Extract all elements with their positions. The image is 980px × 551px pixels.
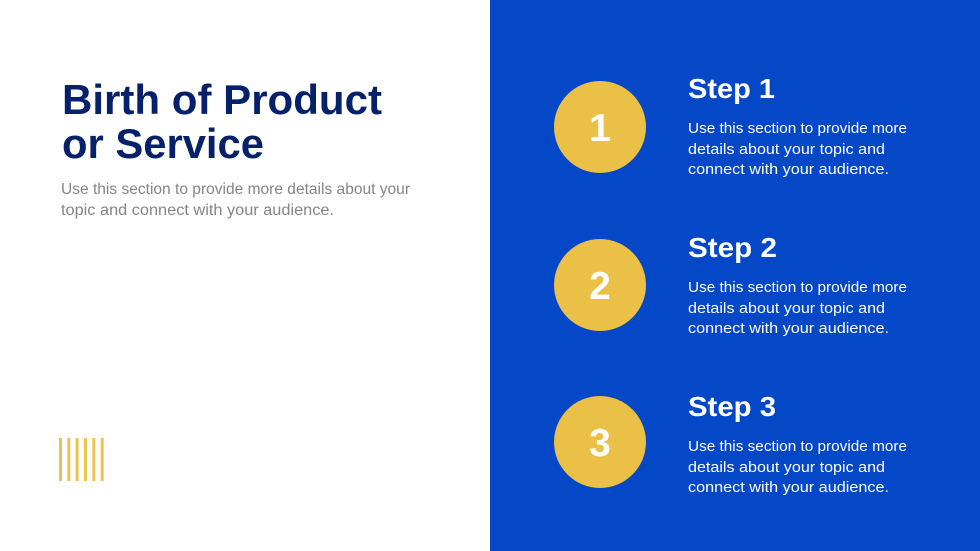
- step 1: [554, 73, 907, 178]
- step 1 number badge: 1: [589, 107, 611, 150]
- step 2 heading: Step 2: [688, 232, 777, 263]
- description text: [61, 181, 410, 219]
- title: [62, 76, 382, 167]
- step 2 number badge: 2: [589, 265, 611, 308]
- step 2 text: connect with your audience.: [688, 320, 889, 337]
- step 1 text: connect with your audience.: [688, 161, 889, 178]
- description text: Use this section to provide more details about your: [61, 181, 410, 198]
- description text: topic and connect with your audience.: [61, 202, 334, 219]
- step 3 text: connect with your audience.: [688, 479, 889, 496]
- step 1 text: details about your topic and: [688, 141, 885, 158]
- icon: yellow vertical bars: [59, 438, 104, 481]
- panel: blue steps background: [490, 0, 980, 551]
- step 2 number badge: [554, 239, 646, 331]
- step 3 number badge: 3: [589, 422, 611, 465]
- title: or Service: [62, 120, 264, 167]
- step 2 text: details about your topic and: [688, 300, 885, 317]
- step 1 text: [688, 120, 907, 178]
- step 2: [554, 232, 907, 337]
- step 1 number badge: [554, 81, 646, 173]
- step 1 heading: Step 1: [688, 73, 775, 104]
- step 1 text: Use this section to provide more: [688, 120, 907, 137]
- step 3 number badge: [554, 396, 646, 488]
- title: Birth of Product: [62, 76, 382, 123]
- step 3 text: details about your topic and: [688, 459, 885, 476]
- step 3: [554, 391, 907, 496]
- step 2 text: [688, 279, 907, 337]
- step 3 text: Use this section to provide more: [688, 438, 907, 455]
- step 3 heading: Step 3: [688, 391, 776, 422]
- step 2 text: Use this section to provide more: [688, 279, 907, 296]
- step 3 text: [688, 438, 907, 496]
